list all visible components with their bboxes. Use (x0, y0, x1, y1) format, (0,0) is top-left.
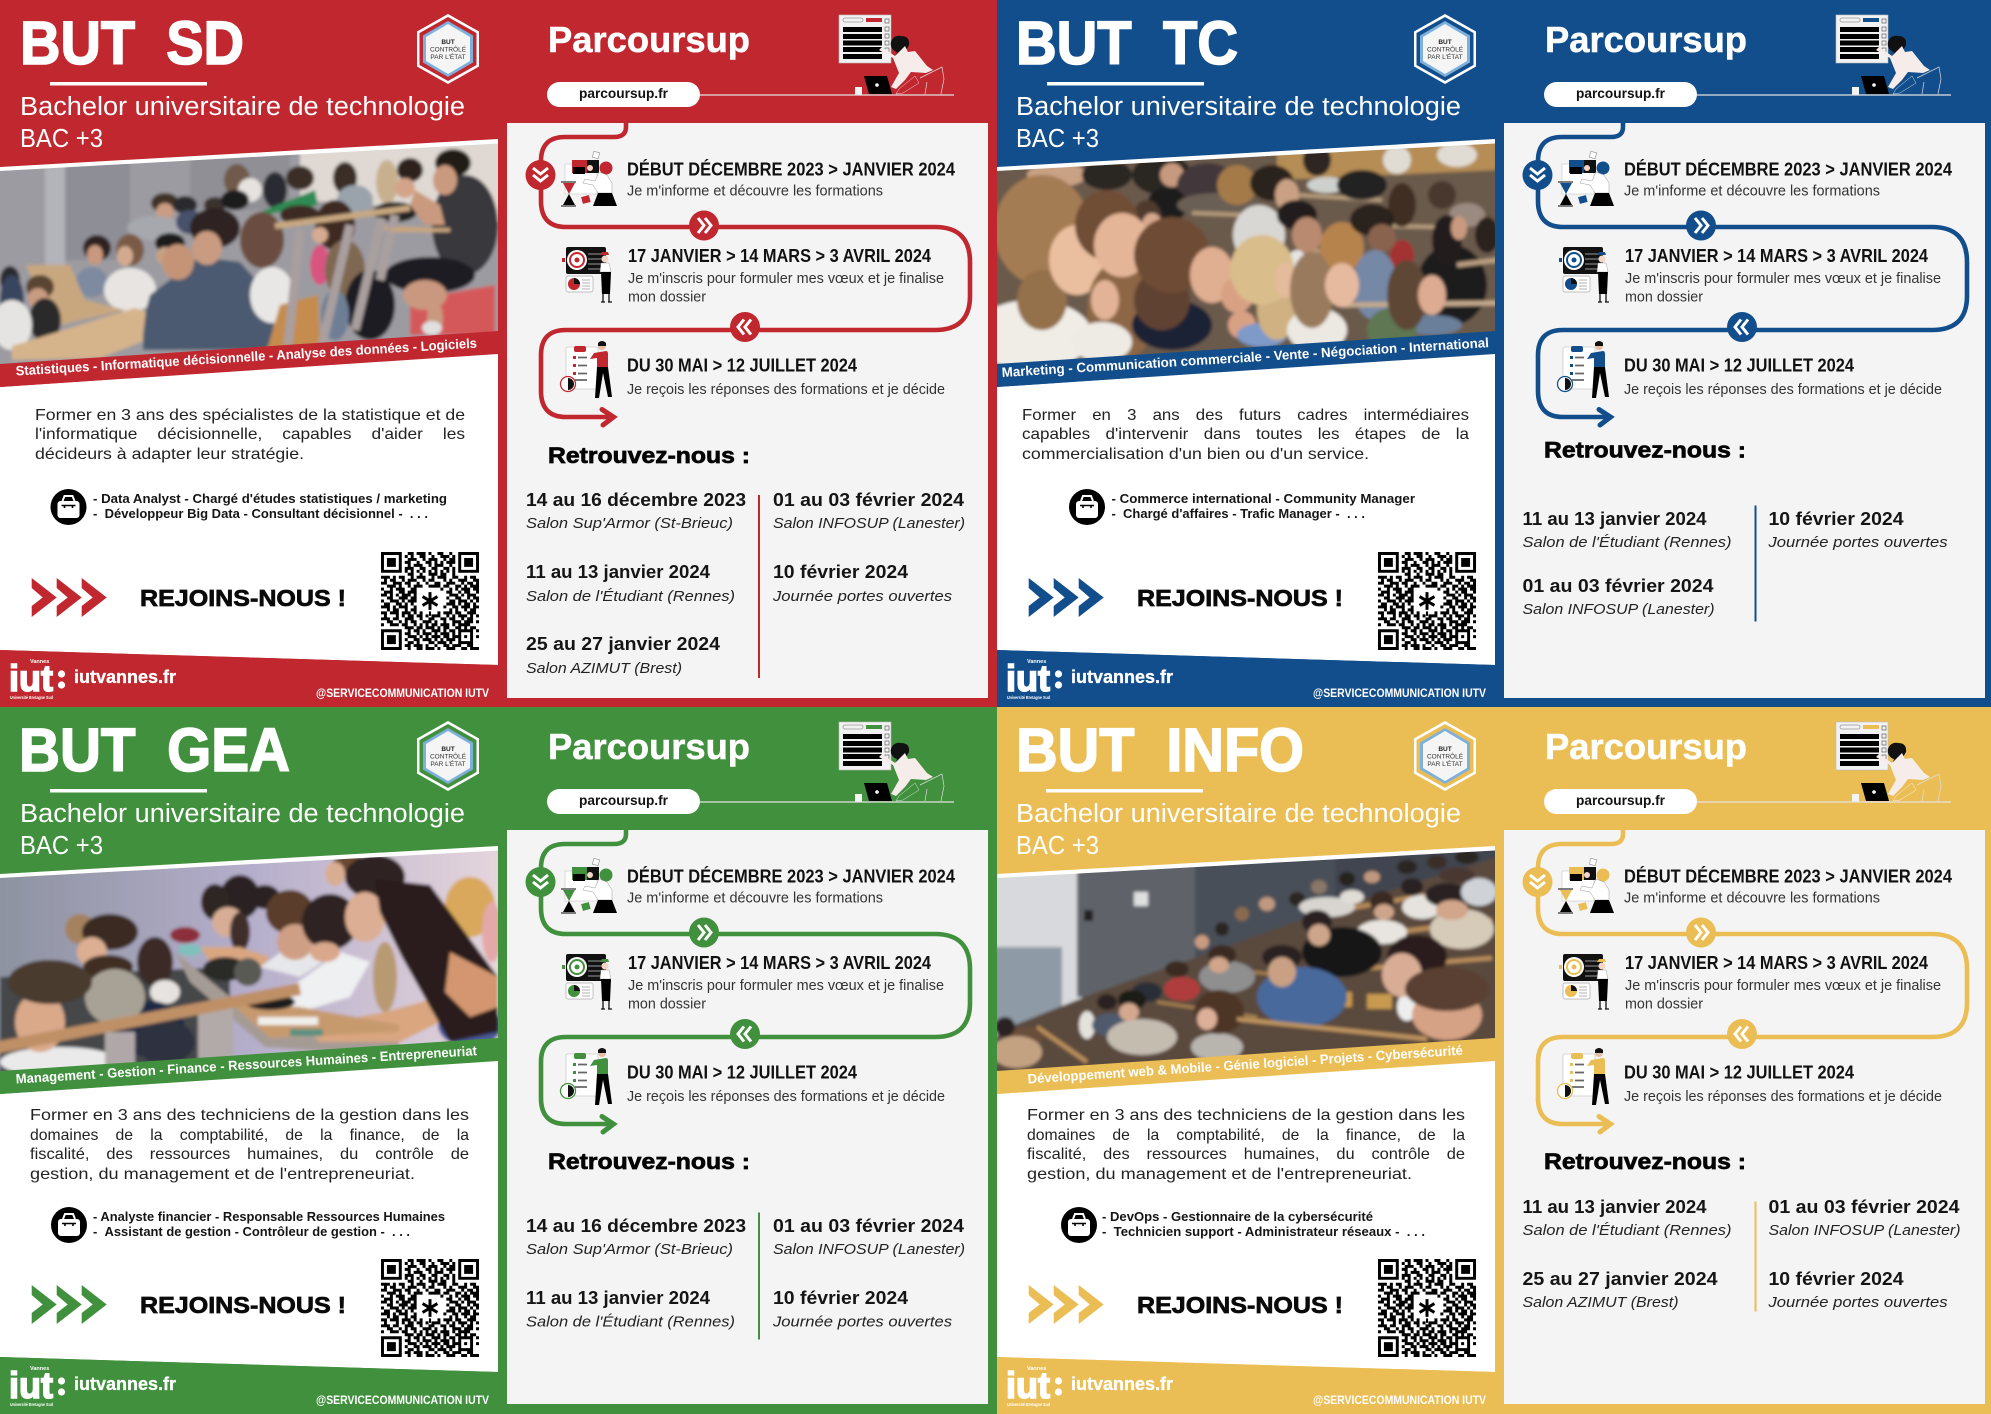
pill: parcoursup.fr: parcoursup.fr (1576, 85, 1666, 101)
events left column: Salon de l'Étudiant (Rennes) (526, 588, 735, 605)
panel: calendar and events (507, 123, 988, 698)
events left column: 01 au 03 février 2024 (1522, 576, 1714, 596)
careers text: - Analyste financier - Responsable Ressources Humaines (93, 1209, 445, 1224)
photo: students writing (0, 837, 505, 1077)
timeline marker right (689, 918, 719, 948)
logo IUT Vannes: Vannes (1027, 659, 1046, 665)
timeline marker right (1686, 210, 1716, 240)
step 2 illustration (562, 954, 612, 1009)
events right column: 10 février 2024 (1768, 509, 1904, 529)
poster: BUT INFO (yellow) (992, 707, 1991, 1414)
badge: BUT contrôlé par l'État: BUT (441, 746, 455, 753)
events right column: Salon INFOSUP (Lanester) (1768, 1222, 1960, 1239)
QR code (1378, 552, 1476, 650)
step 2 text: 17 JANVIER > 14 MARS > 3 AVRIL 2024 (1625, 953, 1928, 973)
badge: BUT contrôlé par l'État: PAR L'ÉTAT (1427, 759, 1463, 768)
logo IUT Vannes: Université Bretagne Sud (10, 695, 53, 700)
title underline (50, 82, 207, 86)
timeline marker left (730, 312, 760, 342)
logo IUT Vannes: Vannes (30, 1366, 49, 1372)
step 3 text (1624, 1062, 1942, 1105)
step 2 text: Je m'inscris pour formuler mes vœux et je finalise (628, 978, 944, 994)
step 1 text: Je m'informe et découvre les formations (627, 890, 883, 906)
events divider (758, 495, 760, 678)
call to action: REJOINS-NOUS ! (140, 585, 346, 611)
icon: briefcase (1061, 1207, 1097, 1243)
subtitle: Bachelor universitaire de technologie (1016, 93, 1461, 121)
logo IUT Vannes: Vannes (1027, 1366, 1046, 1372)
photo: students in lecture hall (0, 130, 505, 370)
white content panel (0, 1060, 498, 1372)
white stripe above photo (997, 139, 1495, 171)
step 1 text (627, 158, 955, 200)
description text: fiscalité, des ressources humaines, du contrôle de (30, 1146, 469, 1163)
level BAC +3: BAC +3 (1016, 125, 1099, 153)
events right column: Journée portes ouvertes (772, 1314, 953, 1330)
footer band (997, 1357, 1495, 1414)
step 2 text (628, 953, 944, 1012)
step 1 text: Je m'informe et découvre les formations (1624, 890, 1880, 906)
careers text: - Commerce international - Community Manager (1112, 491, 1415, 506)
events left column: 14 au 16 décembre 2023 (526, 490, 746, 510)
events left column: 25 au 27 janvier 2024 (1522, 1269, 1718, 1289)
timeline path (541, 123, 970, 425)
panel background green (0, 707, 997, 1414)
step 3 text: DU 30 MAI > 12 JUILLET 2024 (627, 356, 857, 376)
icon: briefcase (1069, 489, 1105, 525)
events divider (1754, 1202, 1756, 1312)
step 3 illustration (560, 341, 612, 398)
events right column: 10 février 2024 (773, 1288, 908, 1308)
events left column: 14 au 16 décembre 2023 (526, 1216, 746, 1236)
pill: parcoursup.fr (547, 789, 700, 814)
description text (1027, 1107, 1465, 1183)
step 3 text (627, 1062, 945, 1105)
title BUT TC: BUT TC (1016, 9, 1238, 77)
photo: full lecture hall (997, 850, 1495, 1071)
pill: parcoursup.fr (1544, 82, 1697, 107)
step 3 text: Je reçois les réponses des formations et je décide (627, 1089, 945, 1105)
careers text: - Chargé d'affaires - Trafic Manager - . . . (1112, 506, 1365, 521)
logo IUT Vannes: iut (9, 658, 53, 699)
badge: BUT contrôlé par l'État (1414, 721, 1476, 791)
step 2 text: Je m'inscris pour formuler mes vœux et je finalise (628, 271, 944, 287)
panel: calendar and events (1504, 123, 1985, 698)
events right column: Journée portes ouvertes (772, 588, 953, 605)
events left column: 11 au 13 janvier 2024 (1522, 509, 1706, 529)
footer band (0, 1357, 498, 1414)
events left column (526, 1216, 746, 1330)
badge: BUT contrôlé par l'État: BUT (1438, 746, 1452, 753)
step 1 text: DÉBUT DÉCEMBRE 2023 > JANVIER 2024 (627, 866, 955, 886)
timeline marker right (689, 210, 719, 240)
title BUT SD: BUT SD (20, 9, 244, 77)
description text: gestion, du management et de l'entrepreneuriat. (30, 1166, 415, 1183)
step 3 text (1624, 356, 1942, 398)
title BUT INFO: BUT INFO (1016, 716, 1304, 784)
step 3 illustration (560, 1048, 612, 1105)
timeline path (541, 830, 970, 1132)
icon: triple chevron arrow (1029, 578, 1104, 617)
heading Retrouvez-nous: Retrouvez-nous : (1544, 1149, 1746, 1174)
pill: parcoursup.fr: parcoursup.fr (579, 85, 669, 101)
badge: BUT contrôlé par l'État: CONTRÔLÉ (1427, 44, 1464, 54)
events left column: Salon AZIMUT (Brest) (526, 660, 682, 677)
badge: BUT contrôlé par l'État: PAR L'ÉTAT (430, 759, 466, 768)
step 3 illustration (1558, 341, 1609, 398)
badge: BUT contrôlé par l'État: BUT (1438, 39, 1452, 46)
step 2 text: 17 JANVIER > 14 MARS > 3 AVRIL 2024 (628, 953, 931, 973)
step 1 text (627, 866, 955, 906)
events left column: Salon AZIMUT (Brest) (1522, 1294, 1679, 1311)
step 2 text: mon dossier (628, 290, 706, 306)
step 2 text: 17 JANVIER > 14 MARS > 3 AVRIL 2024 (628, 246, 931, 266)
heading Parcoursup: Parcoursup (1545, 19, 1747, 60)
events right column: Salon INFOSUP (Lanester) (773, 515, 965, 532)
badge: BUT contrôlé par l'État (417, 721, 479, 791)
icon: briefcase (51, 1207, 87, 1243)
step 2 text: mon dossier (628, 996, 706, 1012)
level BAC +3: BAC +3 (20, 125, 103, 153)
events left column: 11 au 13 janvier 2024 (1522, 1197, 1706, 1217)
step 3 text: Je reçois les réponses des formations et je décide (1624, 382, 1942, 398)
step 1 illustration (561, 151, 617, 206)
events right column (1767, 509, 1948, 551)
QR code (381, 1259, 479, 1357)
description text: décideurs à adapter leur stratégie. (35, 446, 304, 463)
events right column (1767, 1197, 1960, 1311)
careers text: - Assistant de gestion - Contrôleur de gestion - . . . (93, 1224, 410, 1239)
step 1 text: DÉBUT DÉCEMBRE 2023 > JANVIER 2024 (1624, 158, 1952, 180)
subtitle: Bachelor universitaire de technologie (1016, 800, 1461, 828)
keywords band: Marketing - Communication commerciale - Vente - Négociation - International (1001, 335, 1489, 380)
level BAC +3: BAC +3 (1016, 832, 1099, 860)
description text: l'informatique décisionnelle, capables d'aider les (35, 426, 465, 443)
description text (30, 1107, 469, 1183)
events left column (1522, 1197, 1732, 1311)
keywords band: Statistiques - Informatique décisionnelle - Analyse des données - Logiciels (15, 336, 477, 378)
heading Retrouvez-nous: Retrouvez-nous : (548, 1149, 750, 1174)
white stripe above photo (997, 846, 1495, 878)
careers text: - Technicien support - Administrateur réseaux - . . . (1102, 1224, 1425, 1239)
website link: iutvannes.fr (74, 1374, 176, 1394)
description text: gestion, du management et de l'entrepreneuriat. (1027, 1166, 1412, 1183)
logo IUT Vannes: Vannes (30, 659, 49, 665)
step 3 text: DU 30 MAI > 12 JUILLET 2024 (627, 1062, 857, 1082)
step 1 illustration (561, 858, 617, 913)
timeline marker left (730, 1019, 760, 1049)
website link: iutvannes.fr (1071, 667, 1173, 687)
keywords band: Management - Gestion - Finance - Ressources Humaines - Entrepreneuriat (15, 1043, 478, 1086)
events left column: Salon de l'Étudiant (Rennes) (1522, 534, 1732, 551)
QR code (1378, 1259, 1476, 1357)
level BAC +3: BAC +3 (20, 832, 103, 860)
events left column: Salon INFOSUP (Lanester) (1522, 601, 1714, 618)
website link: iutvannes.fr (1071, 1374, 1173, 1394)
poster: BUT TC (blue) (972, 0, 1991, 707)
events right column (772, 1216, 965, 1330)
careers text (93, 491, 447, 521)
events left column: 25 au 27 janvier 2024 (526, 634, 720, 654)
title underline (50, 789, 207, 792)
step 2 illustration (1559, 247, 1609, 302)
badge: BUT contrôlé par l'État: CONTRÔLÉ (430, 752, 467, 760)
QR code (381, 552, 479, 650)
careers text (93, 1209, 445, 1239)
logo IUT Vannes: Université Bretagne Sud (1007, 695, 1050, 700)
description text: domaines de la comptabilité, de la finance, de la (30, 1127, 469, 1144)
events left column: 11 au 13 janvier 2024 (526, 562, 710, 582)
badge: BUT contrôlé par l'État (417, 14, 479, 84)
white content panel (997, 353, 1495, 665)
events divider (1754, 506, 1756, 622)
title underline (1047, 82, 1204, 86)
call to action: REJOINS-NOUS ! (1137, 585, 1343, 611)
events right column: Journée portes ouvertes (1767, 534, 1948, 551)
logo IUT Vannes: iut (1006, 658, 1050, 699)
poster: BUT SD (red) (0, 0, 997, 707)
careers text: - DevOps - Gestionnaire de la cybersécurité (1102, 1209, 1373, 1224)
social handle: @SERVICECOMMUNICATION IUTV (1313, 1395, 1486, 1407)
events right column: Salon INFOSUP (Lanester) (773, 1241, 965, 1258)
step 3 text (627, 356, 945, 398)
step 2 illustration (1559, 954, 1609, 1009)
white stripe above photo (0, 846, 498, 878)
events left column: Salon Sup'Armor (St-Brieuc) (526, 1241, 733, 1258)
step 1 text (1624, 866, 1952, 906)
badge: BUT contrôlé par l'État: PAR L'ÉTAT (430, 52, 466, 61)
step 3 illustration (1558, 1048, 1609, 1105)
poster: BUT GEA (green) (0, 707, 997, 1414)
careers text: - Développeur Big Data - Consultant décisionnel - . . . (93, 506, 428, 521)
panel: calendar and events (1504, 830, 1985, 1404)
events left column: 11 au 13 janvier 2024 (526, 1288, 710, 1308)
subtitle: Bachelor universitaire de technologie (20, 93, 465, 121)
title BUT GEA: BUT GEA (19, 716, 290, 784)
badge: BUT contrôlé par l'État (1414, 14, 1476, 84)
timeline path (1538, 123, 1967, 425)
description text: Former en 3 ans des futurs cadres intermédiaires (1022, 407, 1469, 424)
description text: Former en 3 ans des spécialistes de la statistique et de (35, 407, 465, 424)
icon: triple chevron arrow (32, 578, 107, 617)
timeline marker left (1727, 1019, 1757, 1049)
timeline marker right (1686, 918, 1716, 948)
social handle: @SERVICECOMMUNICATION IUTV (316, 1395, 489, 1407)
events left column: Salon de l'Étudiant (Rennes) (526, 1314, 735, 1330)
heading Parcoursup: Parcoursup (548, 19, 750, 60)
step 3 text: Je reçois les réponses des formations et je décide (1624, 1089, 1942, 1105)
step 1 text: DÉBUT DÉCEMBRE 2023 > JANVIER 2024 (1624, 866, 1952, 886)
badge: BUT contrôlé par l'État: BUT (441, 39, 455, 46)
events right column: 10 février 2024 (773, 562, 908, 582)
step 1 text: Je m'informe et découvre les formations (1624, 184, 1880, 200)
step 2 text (1625, 953, 1941, 1012)
step 2 text (628, 246, 944, 306)
careers text (1102, 1209, 1425, 1239)
logo IUT Vannes: Université Bretagne Sud (10, 1402, 53, 1407)
illustration: woman at laptop (700, 722, 954, 802)
description text: Former en 3 ans des techniciens de la gestion dans les (30, 1107, 469, 1124)
icon: triple chevron arrow (32, 1285, 107, 1324)
description text: capables d'intervenir dans toutes les étapes de la (1022, 426, 1469, 443)
heading Retrouvez-nous: Retrouvez-nous : (548, 443, 750, 468)
description text: fiscalité, des ressources humaines, du contrôle de (1027, 1146, 1465, 1163)
panel background blue (997, 0, 1991, 707)
footer band (0, 650, 498, 707)
events divider (758, 1212, 760, 1340)
step 1 illustration (1558, 151, 1614, 206)
timeline marker left (1727, 312, 1757, 342)
events right column: 01 au 03 février 2024 (773, 1216, 964, 1236)
illustration: woman at laptop (700, 15, 954, 95)
timeline marker down (1522, 160, 1552, 190)
step 1 text (1624, 158, 1952, 200)
heading Parcoursup: Parcoursup (548, 726, 750, 767)
title underline (1046, 789, 1203, 792)
call to action: REJOINS-NOUS ! (140, 1292, 346, 1318)
logo IUT Vannes: Université Bretagne Sud (1007, 1402, 1050, 1407)
description text (35, 407, 465, 463)
badge: BUT contrôlé par l'État: CONTRÔLÉ (1427, 752, 1464, 760)
careers text (1112, 491, 1415, 521)
events left column (1522, 509, 1732, 618)
timeline marker down (526, 867, 556, 897)
heading Retrouvez-nous: Retrouvez-nous : (1544, 438, 1746, 462)
description text: commercialisation d'un bien ou d'un service. (1022, 446, 1369, 463)
step 2 text: 17 JANVIER > 14 MARS > 3 AVRIL 2024 (1625, 246, 1928, 266)
call to action: REJOINS-NOUS ! (1137, 1292, 1343, 1318)
events right column: Journée portes ouvertes (1767, 1294, 1948, 1311)
illustration: woman at laptop (1697, 15, 1951, 95)
step 2 text: mon dossier (1625, 996, 1703, 1012)
social handle: @SERVICECOMMUNICATION IUTV (1313, 688, 1486, 700)
events right column: 01 au 03 février 2024 (773, 490, 964, 510)
careers text: - Data Analyst - Chargé d'études statistiques / marketing (93, 491, 447, 506)
white content panel (0, 353, 498, 665)
timeline path (1538, 830, 1967, 1132)
pill: parcoursup.fr: parcoursup.fr (579, 792, 669, 808)
website link: iutvannes.fr (74, 667, 176, 687)
logo IUT Vannes: iut (9, 1365, 53, 1406)
panel background red (0, 0, 997, 707)
events right column: 10 février 2024 (1768, 1269, 1904, 1289)
icon: triple chevron arrow (1029, 1285, 1104, 1324)
description text (1022, 407, 1469, 463)
step 2 text: Je m'inscris pour formuler mes vœux et je finalise (1625, 978, 1941, 994)
description text: domaines de la comptabilité, de la finance, de la (1027, 1127, 1465, 1144)
step 1 text: DÉBUT DÉCEMBRE 2023 > JANVIER 2024 (627, 158, 955, 180)
white stripe above photo (0, 139, 498, 171)
events right column: 01 au 03 février 2024 (1768, 1197, 1960, 1217)
logo IUT Vannes: iut (1006, 1365, 1050, 1406)
pill: parcoursup.fr (547, 82, 700, 107)
step 3 text: Je reçois les réponses des formations et je décide (627, 382, 945, 398)
step 3 text: DU 30 MAI > 12 JUILLET 2024 (1624, 1062, 1854, 1082)
events left column: Salon de l'Étudiant (Rennes) (1522, 1222, 1732, 1239)
pill: parcoursup.fr: parcoursup.fr (1576, 792, 1666, 808)
icon: briefcase (50, 489, 86, 525)
step 1 illustration (1558, 858, 1614, 913)
step 1 text: Je m'informe et découvre les formations (627, 184, 883, 200)
heading Parcoursup: Parcoursup (1545, 726, 1747, 767)
events right column (772, 490, 965, 605)
step 2 text: Je m'inscris pour formuler mes vœux et je finalise (1625, 271, 1941, 287)
pill: parcoursup.fr (1544, 789, 1697, 814)
description text: Former en 3 ans des techniciens de la gestion dans les (1027, 1107, 1465, 1124)
social handle: @SERVICECOMMUNICATION IUTV (316, 688, 489, 700)
subtitle: Bachelor universitaire de technologie (20, 800, 465, 828)
step 3 text: DU 30 MAI > 12 JUILLET 2024 (1624, 356, 1854, 376)
photo: attentive students (997, 144, 1495, 364)
badge: BUT contrôlé par l'État: PAR L'ÉTAT (1427, 52, 1463, 61)
badge: BUT contrôlé par l'État: CONTRÔLÉ (430, 44, 467, 54)
white content panel (997, 1060, 1495, 1372)
keywords band: Développement web & Mobile - Génie logiciel - Projets - Cybersécurité (1027, 1043, 1464, 1086)
panel background yellow (997, 707, 1991, 1414)
step 2 text (1625, 246, 1941, 306)
events left column (526, 490, 746, 677)
illustration: woman at laptop (1697, 722, 1951, 802)
timeline marker down (1522, 867, 1552, 897)
step 2 illustration (562, 247, 612, 302)
events left column: Salon Sup'Armor (St-Brieuc) (526, 515, 733, 532)
step 2 text: mon dossier (1625, 290, 1703, 306)
footer band (997, 650, 1495, 707)
panel: calendar and events (507, 830, 988, 1404)
timeline marker down (526, 160, 556, 190)
